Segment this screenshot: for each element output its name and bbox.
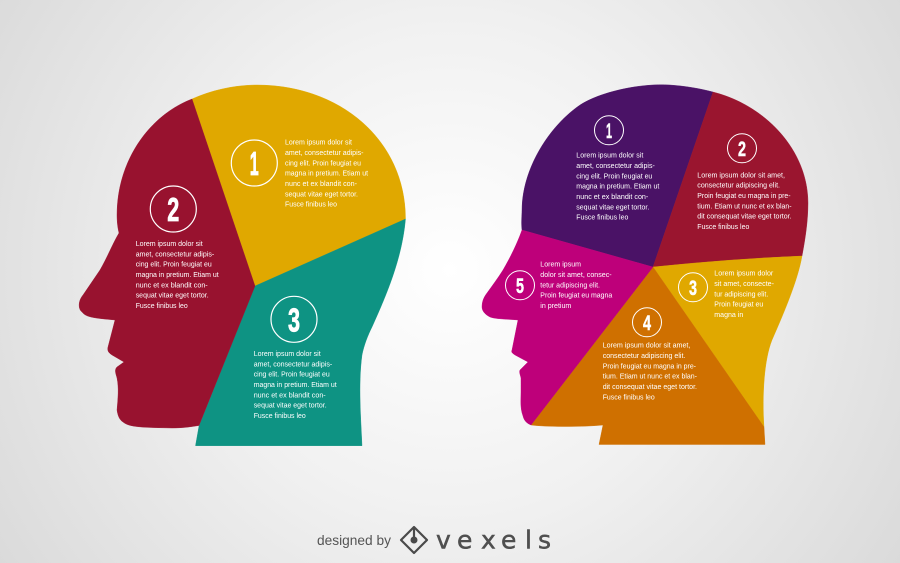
text block 3: sit amet, consecte- [714, 279, 774, 288]
text block 1: magna in pretium. Etiam ut [576, 182, 660, 191]
text block 1: nunc et ex blandit con- [285, 179, 357, 188]
number badge 1: 1 [250, 145, 259, 182]
text block 5: Lorem ipsum [540, 260, 581, 269]
text block 2: tium. Etiam ut nunc et ex blan- [697, 201, 792, 210]
number badge 3 [271, 296, 317, 342]
text block 2: Lorem ipsum dolor sit amet, [697, 170, 785, 179]
number badge 5 [506, 271, 534, 300]
text block 2: Fusce finibus leo [697, 222, 749, 231]
number badge 3: 3 [689, 277, 697, 300]
text block 4: Fusce finibus leo [603, 392, 655, 401]
text block 1: Lorem ipsum dolor sit [285, 138, 353, 147]
text block 2: Lorem ipsum dolor sit [136, 239, 204, 248]
text block 1: Fusce finibus leo [285, 200, 337, 209]
icon: vexels diamond [401, 527, 427, 553]
panel: left head segment 1 yellow [192, 85, 406, 286]
number badge 2: 2 [167, 191, 179, 228]
text block 3: magna in pretium. Etiam ut [254, 380, 338, 389]
text block 2 [136, 239, 220, 310]
text block 2: magna in pretium. Etiam ut [136, 270, 220, 279]
text block 3: sequat vitae eget tortor. [254, 401, 327, 410]
text block 2: Proin feugiat eu magna in pre- [697, 191, 791, 200]
text block 1: cing elit. Proin feugiat eu [576, 171, 652, 180]
text block 1: amet, consectetur adipis- [285, 148, 364, 157]
number badge 4: 4 [643, 312, 651, 335]
text block 3: Lorem ipsum dolor [714, 269, 774, 278]
text block 5: dolor sit amet, consec- [540, 270, 612, 279]
number badge 3 [678, 273, 708, 302]
text block 1: amet, consectetur adipis- [576, 161, 655, 170]
number badge 5: 5 [516, 275, 524, 298]
panel: right head segment 2 crimson [653, 92, 808, 267]
text block 1 [285, 138, 369, 209]
number badge 1: 1 [606, 120, 612, 143]
text block 3: amet, consectetur adipis- [254, 359, 333, 368]
text block 1: Fusce finibus leo [576, 213, 628, 222]
text block 4: consectetur adipiscing elit. [603, 351, 685, 360]
left head infographic [79, 85, 406, 446]
text block 3: nunc et ex blandit con- [254, 390, 326, 399]
text block 1 [576, 151, 660, 222]
text block 2: Fusce finibus leo [136, 301, 188, 310]
text block 3 [714, 269, 774, 319]
watermark logo [317, 526, 551, 554]
text block 2: consectetur adipiscing elit. [697, 181, 780, 190]
panel: right head segment 4 orange [531, 267, 765, 444]
number badge 2 [728, 134, 756, 163]
panel: right head segment 5 magenta [482, 230, 653, 425]
text block 5 [540, 260, 613, 310]
text block 1: nunc et ex blandit con- [576, 192, 649, 201]
text block 4 [603, 341, 697, 401]
number badge 3: 3 [288, 301, 300, 338]
text block 3 [254, 349, 338, 420]
text block 1: sequat vitae eget tortor. [576, 202, 649, 211]
text block 3: Lorem ipsum dolor sit [254, 349, 322, 358]
text block 3: Fusce finibus leo [254, 411, 306, 420]
right head infographic [482, 85, 808, 444]
number badge 2 [150, 186, 196, 232]
panel: right head segment 3 yellow [653, 256, 802, 427]
number badge 2: 2 [738, 138, 746, 161]
text block 4: tium. Etiam ut nunc et ex blan- [603, 372, 697, 381]
text block 2: sequat vitae eget tortor. [136, 291, 209, 300]
number badge 4 [632, 308, 662, 337]
text block 4: Proin feugiat eu magna in pre- [603, 361, 696, 370]
text block 5: tetur adipiscing elit. [540, 280, 600, 289]
number badge 1 [594, 116, 624, 145]
vexels wordmark: vexels [436, 526, 551, 554]
text block 1: cing elit. Proin feugiat eu [285, 158, 361, 167]
text block 5: Proin feugiat eu magna [540, 291, 613, 300]
text block 3: Proin feugiat eu [714, 300, 763, 309]
text block 3: magna in [714, 310, 743, 319]
text block 2: nunc et ex blandit con- [136, 280, 208, 289]
text block 2 [697, 170, 792, 231]
text block 1: magna in pretium. Etiam ut [285, 169, 369, 178]
designed by label: designed by [317, 532, 391, 548]
panel: left head segment 2 red [79, 99, 255, 428]
text block 5: in pretium [540, 301, 571, 310]
text block 4: dit consequat vitae eget tortor. [603, 382, 697, 391]
text block 1: Lorem ipsum dolor sit [576, 151, 644, 160]
number badge 1 [231, 140, 277, 186]
panel: left head segment 3 teal [196, 219, 406, 446]
text block 3: cing elit. Proin feugiat eu [254, 370, 330, 379]
text block 2: dit consequat vitae eget tortor. [697, 212, 792, 221]
text block 3: tur adipiscing elit. [714, 289, 768, 298]
text block 2: amet, consectetur adipis- [136, 249, 215, 258]
text block 4: Lorem ipsum dolor sit amet, [603, 341, 690, 350]
text block 2: cing elit. Proin feugiat eu [136, 260, 212, 269]
panel: right head segment 1 purple [522, 85, 713, 267]
text block 1: sequat vitae eget tortor. [285, 189, 358, 198]
